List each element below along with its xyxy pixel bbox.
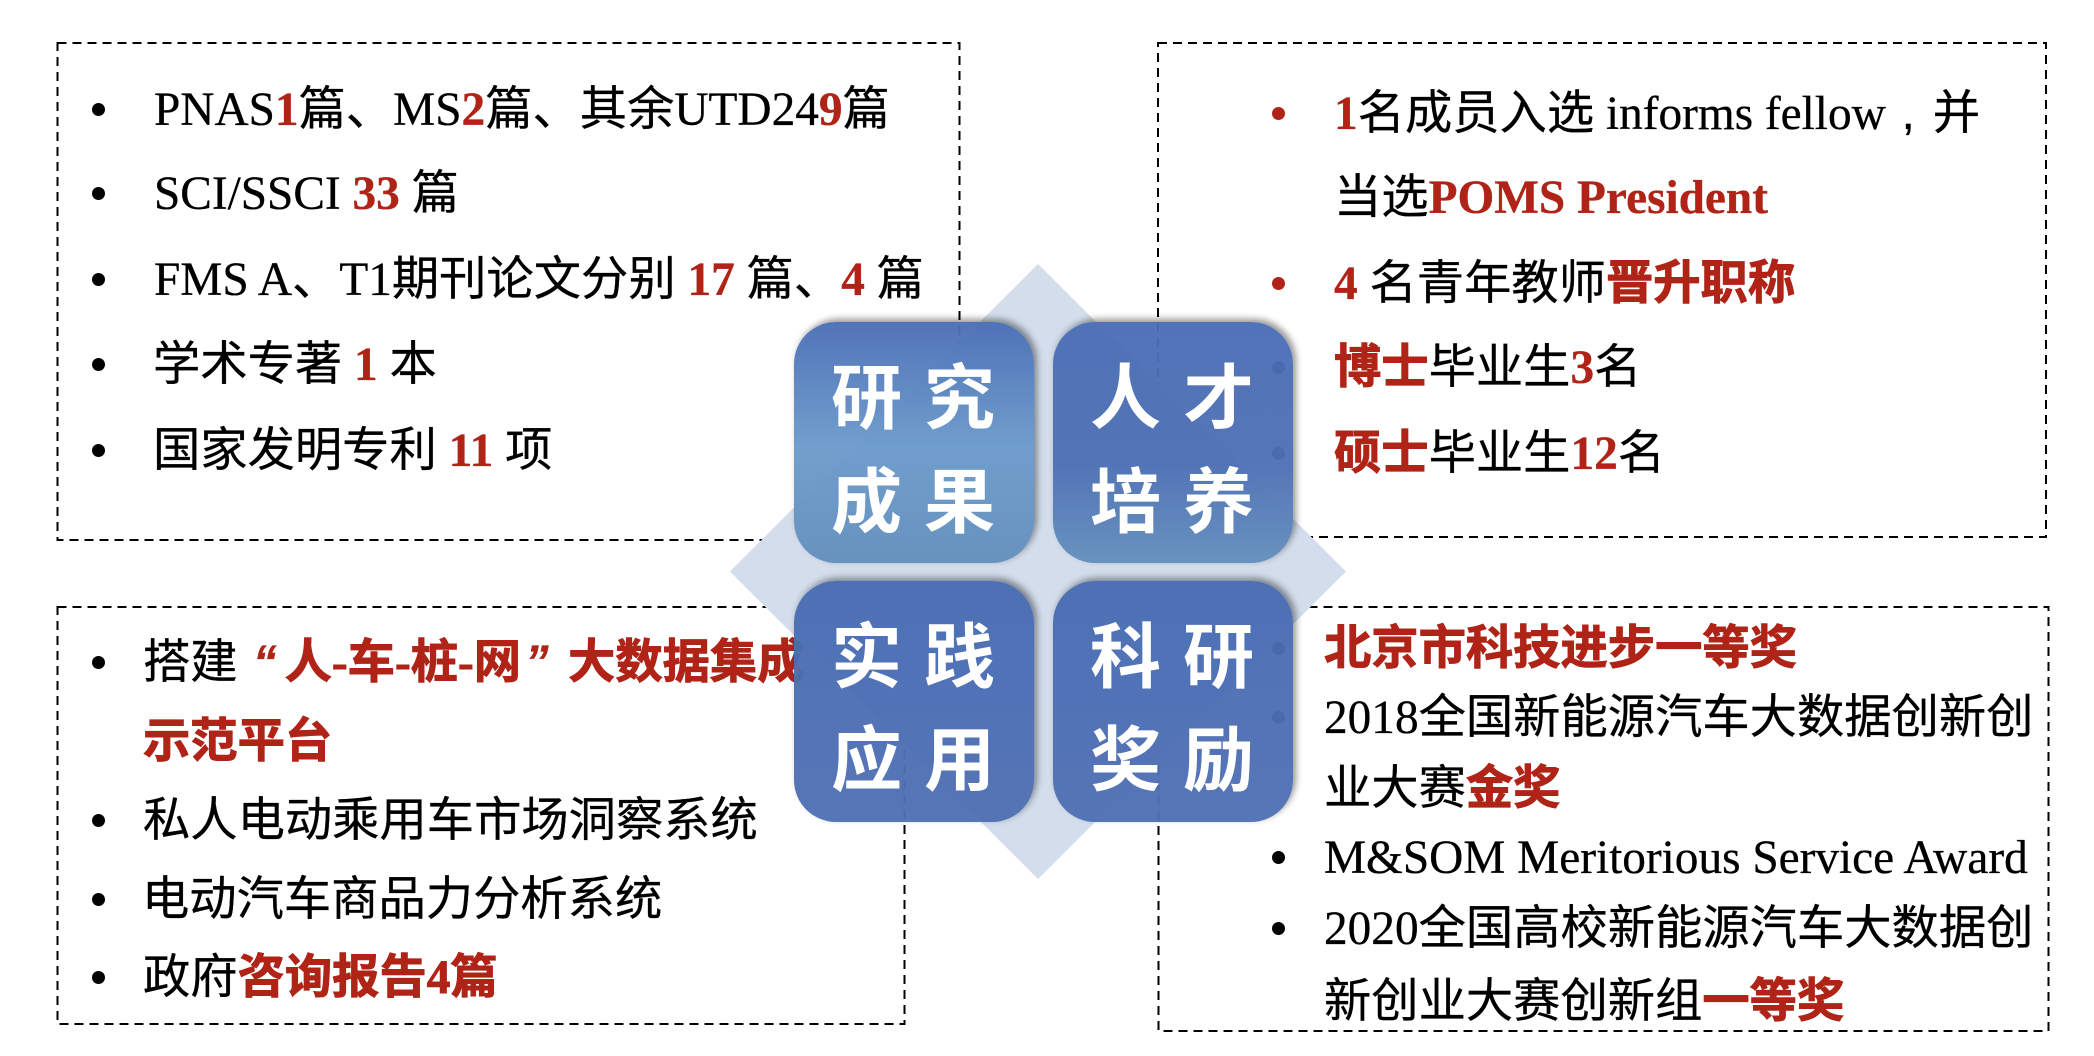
tile text: application: 应用: [831, 722, 1017, 801]
tile text: research: 研究: [831, 360, 1017, 439]
list item: patents: 国家发明专利 11 项: [153, 425, 552, 477]
list item: FMS journal papers: FMS A、T1期刊论文分别 17 篇、4 篇: [154, 254, 924, 306]
tile text: practice: 实践: [831, 619, 1017, 698]
list item: 2018 competition gold award: 业大赛金奖: [1324, 763, 1560, 815]
list item: big data demo platform: 示范平台: [143, 716, 332, 768]
list item: 2020 competition first prize: 新创业大赛创新组一等奖: [1324, 976, 1844, 1028]
list item: consulting reports: 政府咨询报告4篇: [143, 952, 498, 1004]
background diamond: [730, 264, 1346, 879]
tile text: development: 培养: [1090, 464, 1276, 543]
list item: informs fellow and POMS President: 1名成员入选 informs fellow , 并: [1334, 87, 1980, 140]
tile text: awards: 奖励: [1090, 722, 1276, 801]
list item: big data demo platform: 搭建 人-车-桩-网 大数据集成: [143, 637, 805, 689]
tile text: output: 成果: [831, 464, 1017, 543]
list item: Beijing science award: 北京市科技进步一等奖: [1324, 623, 1797, 675]
panel: talent development list: [1157, 42, 2047, 538]
panel: research output list: [56, 42, 960, 541]
list item: SCI/SSCI papers: SCI/SSCI 33 篇: [154, 168, 459, 220]
tile text: research: 科研: [1090, 619, 1276, 698]
tile: research awards: [1053, 581, 1293, 822]
tile text: talent: 人才: [1090, 360, 1276, 439]
list item: doctoral graduates: 博士毕业生3名: [1334, 342, 1641, 394]
list item: big data demo platform: [92, 636, 805, 768]
panel: practical application list: [56, 606, 906, 1025]
list item: 2020 competition first prize: 2020全国高校新能源汽车大数据创: [1324, 903, 2033, 955]
list item: faculty promotions: 4 名青年教师晋升职称: [1334, 258, 1795, 310]
list item: informs fellow and POMS President: 当选POMS President: [1334, 172, 1768, 224]
list item: M&SOM service award: M&SOM Meritorious Service Award: [1324, 832, 2028, 884]
panel: research awards list: [1158, 606, 2050, 1032]
list item: master graduates: 硕士毕业生12名: [1334, 428, 1665, 480]
list item: 2018 competition gold award: 2018全国新能源汽车大数据创新创: [1324, 692, 2033, 744]
list item: big data demo platform: “: [253, 636, 277, 689]
tile: talent development: [1053, 322, 1293, 563]
list item: market insight system: 私人电动乘用车市场洞察系统: [143, 795, 758, 847]
list item: journal papers: PNAS1篇、MS2篇、其余UTD249篇: [154, 84, 890, 136]
list item: informs fellow and POMS President: [1272, 87, 1980, 224]
list item: product analysis system: 电动汽车商品力分析系统: [142, 874, 662, 926]
list item: 2018 competition gold award: [1272, 692, 2033, 815]
list item: monograph: 学术专著 1 本: [153, 339, 437, 391]
list item: 2020 competition first prize: [1272, 903, 2033, 1028]
tile: research output: [794, 322, 1034, 563]
tile: practical application: [794, 581, 1034, 822]
list item: big data demo platform: ”: [525, 636, 549, 689]
